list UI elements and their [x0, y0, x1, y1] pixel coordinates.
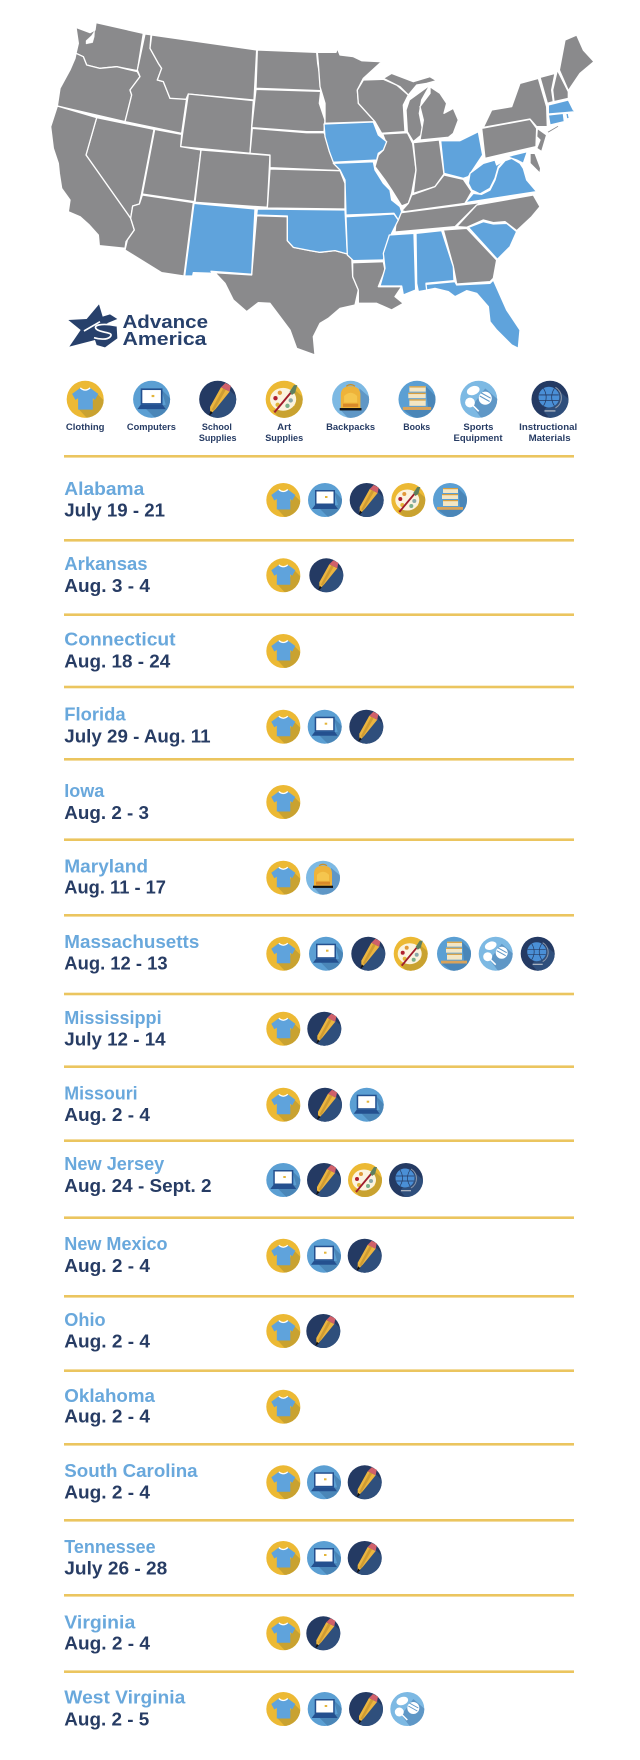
states without a holiday: [51, 23, 594, 355]
row: Alabama: [64, 479, 472, 522]
row: Connecticut: Aug. 18 - 24: [64, 652, 170, 672]
row: New Jersey: New Jersey: [64, 1154, 164, 1174]
state: New Mexico: [185, 203, 255, 276]
row: Arkansas: [64, 554, 348, 597]
legend: [66, 381, 577, 444]
row: South Carolina: [64, 1461, 387, 1504]
row: Mississippi: Mississippi: [64, 1008, 162, 1028]
row: New Jersey: Aug. 24 - Sept. 2: [64, 1176, 212, 1196]
row: Ohio: Aug. 2 - 4: [64, 1332, 150, 1352]
row: Maryland: Maryland: [64, 857, 148, 877]
legend item: computers: Computers: [127, 422, 176, 433]
states with a holiday: [185, 100, 576, 348]
row: South Carolina: Aug. 2 - 4: [64, 1483, 150, 1503]
row: Mississippi: July 12 - 14: [64, 1030, 166, 1050]
state: Mississippi: [380, 233, 416, 295]
row: Iowa: [64, 781, 305, 824]
state: Maryland: [497, 152, 527, 163]
row: Massachusetts: Aug. 12 - 13: [64, 954, 168, 974]
legend item: sports equipment: Equipment: [454, 433, 503, 444]
state: Connecticut: [548, 113, 564, 125]
legend item: backpacks: Backpacks: [326, 422, 375, 433]
legend item: art supplies: Art: [277, 422, 292, 433]
row: Iowa: Aug. 2 - 3: [64, 803, 149, 823]
row: West Virginia: [64, 1688, 429, 1731]
row: Massachusetts: Massachusetts: [64, 932, 199, 952]
legend item: sports equipment: Sports: [463, 422, 493, 433]
row: Iowa: Iowa: [64, 781, 105, 801]
legend item: school supplies: School: [202, 422, 232, 433]
row: New Jersey: [64, 1154, 428, 1202]
state: Massachusetts: [548, 100, 576, 114]
legend item: backpacks: [326, 381, 375, 433]
row: Ohio: Ohio: [64, 1310, 106, 1330]
row: Missouri: Aug. 2 - 4: [64, 1105, 150, 1125]
legend item: computers: [127, 381, 176, 433]
row: Tennessee: July 26 - 28: [64, 1559, 167, 1579]
legend item: books: [398, 381, 441, 433]
row: Alabama: Alabama: [64, 479, 145, 499]
legend item: sports equipment: [454, 381, 503, 444]
row: West Virginia: West Virginia: [64, 1688, 186, 1708]
row: Florida: [64, 705, 388, 749]
row: Virginia: Aug. 2 - 4: [64, 1634, 150, 1654]
row: New Mexico: Aug. 2 - 4: [64, 1256, 150, 1276]
row: Oklahoma: [64, 1386, 305, 1429]
legend item: clothing: [66, 381, 109, 433]
row: Tennessee: Tennessee: [64, 1537, 156, 1557]
row: Arkansas: Arkansas: [64, 554, 148, 574]
state: Ohio: [441, 132, 483, 178]
map of the United States: [51, 23, 594, 355]
row: Missouri: [64, 1083, 389, 1127]
row: West Virginia: Aug. 2 - 5: [64, 1710, 149, 1730]
row: Tennessee: [64, 1537, 387, 1580]
legend item: instructional materials: Materials: [529, 433, 571, 444]
state: Arkansas: [346, 214, 398, 261]
row: Florida: Florida: [64, 705, 127, 725]
row: Virginia: Virginia: [64, 1612, 136, 1632]
row: Alabama: July 19 - 21: [64, 501, 165, 521]
state: Alabama: [416, 231, 454, 292]
row: New Mexico: New Mexico: [64, 1234, 168, 1254]
row: Missouri: Missouri: [64, 1083, 138, 1103]
row: Maryland: [64, 857, 345, 900]
row: Ohio: [64, 1310, 345, 1353]
legend item: instructional materials: [519, 381, 577, 444]
row: Massachusetts: [64, 932, 560, 976]
row: Maryland: Aug. 11 - 17: [64, 878, 166, 898]
row: Virginia: [64, 1612, 345, 1655]
state: South Carolina: [468, 222, 517, 259]
row: South Carolina: South Carolina: [64, 1461, 199, 1481]
logo wordmark: Advance: [122, 311, 208, 332]
state: Missouri: [333, 162, 402, 220]
state: Virginia: [465, 158, 537, 203]
row: New Mexico: [64, 1234, 387, 1278]
legend item: instructional materials: Instructional: [519, 422, 577, 433]
legend item: art supplies: Supplies: [265, 433, 303, 444]
state: Rhode Island: [566, 113, 569, 119]
state: West Virginia: [468, 160, 505, 194]
row: Oklahoma: Aug. 2 - 4: [64, 1407, 150, 1427]
row: Connecticut: [64, 630, 305, 673]
logo: Advance America: [68, 304, 208, 349]
state: Oklahoma: [257, 209, 347, 254]
legend item: clothing: Clothing: [66, 422, 105, 433]
state: Iowa: [324, 122, 387, 162]
row: Arkansas: Aug. 3 - 4: [64, 576, 150, 596]
row: Mississippi: [64, 1008, 346, 1051]
row: Connecticut: Connecticut: [64, 630, 176, 650]
legend item: school supplies: [199, 381, 242, 444]
row: Oklahoma: Oklahoma: [64, 1386, 156, 1406]
logo: Advance America: America: [122, 328, 207, 349]
legend item: books: Books: [403, 422, 430, 433]
state: Florida: [426, 280, 520, 348]
logo star mark: [68, 304, 117, 347]
legend item: art supplies: [265, 381, 308, 444]
row: Florida: July 29 - Aug. 11: [64, 727, 211, 747]
legend item: school supplies: Supplies: [199, 433, 236, 444]
